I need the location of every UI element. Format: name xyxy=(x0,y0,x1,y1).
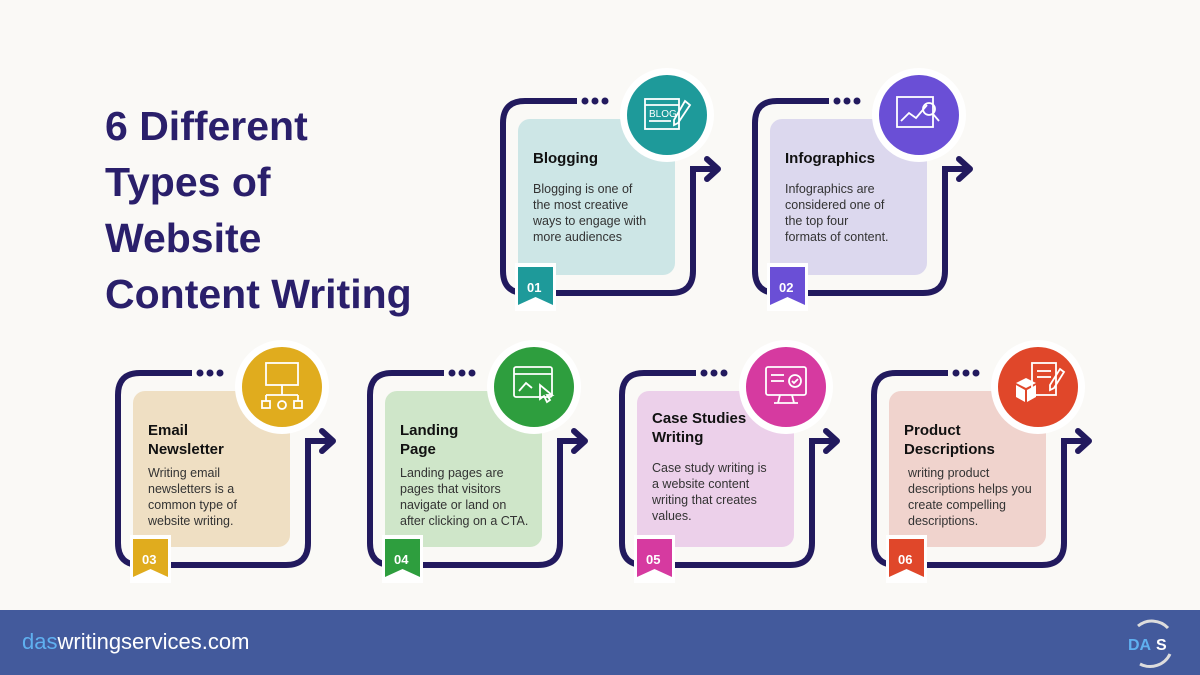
card 05: case studies writing: Case Studies xyxy=(652,410,746,427)
card 04: landing page: 04 xyxy=(394,552,409,567)
card 06: product descriptions: descriptions helps you xyxy=(908,482,1032,496)
card 01: blogging: Blogging is one of xyxy=(533,182,632,196)
card 05: case studies writing: Writing xyxy=(652,429,703,446)
card 03: email newsletter: Writing email xyxy=(148,466,220,480)
footer url: daswritingservices.com xyxy=(22,629,249,654)
card 04: landing page: Landing pages are xyxy=(400,466,504,480)
card 06: product descriptions: descriptions. xyxy=(908,514,978,528)
card 01: blogging: 01 xyxy=(527,280,541,295)
title xyxy=(105,103,412,317)
card 01: blogging xyxy=(500,68,721,311)
card 06: product descriptions xyxy=(871,340,1092,583)
card 05: case studies writing: a website content xyxy=(652,477,749,491)
card 01: blogging: the most creative xyxy=(533,198,628,212)
card 02: infographics: considered one of xyxy=(785,198,884,212)
card 01: blogging: Blogging xyxy=(533,150,598,167)
card 03: email newsletter: website writing. xyxy=(148,514,233,528)
card 03: email newsletter: common type of xyxy=(148,498,237,512)
card 02: infographics: the top four xyxy=(785,214,848,228)
logo: DA xyxy=(1128,637,1152,654)
footer xyxy=(0,610,1200,675)
card 04: landing page: Page xyxy=(400,441,436,458)
card 01: blogging: BLOG xyxy=(649,109,677,120)
card 05: case studies writing: values. xyxy=(652,509,692,523)
card 04: landing page: navigate or land on xyxy=(400,498,506,512)
card 03: email newsletter: Newsletter xyxy=(148,441,224,458)
card 06: product descriptions: create compelling xyxy=(908,498,1006,512)
card 04: landing page: Landing xyxy=(400,422,458,439)
card 02: infographics xyxy=(752,68,973,311)
card 05: case studies writing: Case study writing is xyxy=(652,461,767,475)
card 02: infographics: 02 xyxy=(779,280,793,295)
card 02: infographics: Infographics xyxy=(785,150,875,167)
title: Types of xyxy=(105,159,271,205)
card 06: product descriptions: 06 xyxy=(898,552,912,567)
title: 6 Different xyxy=(105,103,308,149)
card 03: email newsletter xyxy=(115,340,336,583)
card 03: email newsletter: Email xyxy=(148,422,188,439)
card 06: product descriptions: Descriptions xyxy=(904,441,995,458)
card 04: landing page: pages that visitors xyxy=(400,482,501,496)
card 05: case studies writing xyxy=(619,340,840,583)
card 03: email newsletter: newsletters is a xyxy=(148,482,234,496)
card 02: infographics: Infographics are xyxy=(785,182,875,196)
card 06: product descriptions: writing product xyxy=(908,466,989,480)
card 06: product descriptions: Product xyxy=(904,422,961,439)
card 05: case studies writing: 05 xyxy=(646,552,660,567)
logo xyxy=(1128,620,1172,668)
title: Website xyxy=(105,215,261,261)
card 04: landing page xyxy=(367,340,588,583)
card 02: infographics: formats of content. xyxy=(785,230,889,244)
logo: S xyxy=(1156,637,1167,654)
card 04: landing page: after clicking on a CTA. xyxy=(400,514,528,528)
card 01: blogging: more audiences xyxy=(533,230,622,244)
card 03: email newsletter: 03 xyxy=(142,552,156,567)
card 01: blogging: ways to engage with xyxy=(533,214,646,228)
card 05: case studies writing: writing that creates xyxy=(652,493,757,507)
title: Content Writing xyxy=(105,271,412,317)
